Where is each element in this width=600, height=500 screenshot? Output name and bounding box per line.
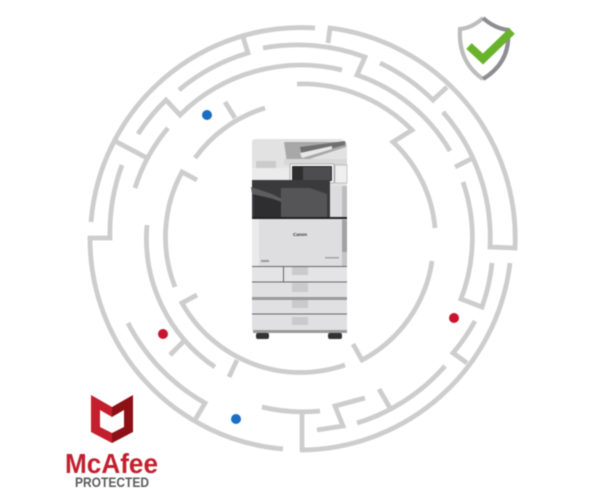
red dot left [158,329,168,339]
red dot right [449,313,459,323]
circular maze [90,28,515,451]
document feeder [284,142,346,163]
printer upper scanner body [252,139,347,218]
touch screen [290,164,334,183]
blue dot bottom [231,414,241,424]
printer lower body [252,219,347,267]
security shield with check icon [460,18,512,79]
keypad [335,165,347,183]
paper drawers [252,266,347,333]
printer feet [256,333,269,339]
McAfee wordmark: McAfee [65,448,158,479]
Canon logo: Canon [293,232,307,237]
printer [251,139,347,339]
McAfee shield [91,395,133,443]
output tray [252,180,330,218]
McAfee logo [65,395,158,490]
protected label: PROTECTED [75,474,149,490]
blue dot top left [202,110,212,120]
